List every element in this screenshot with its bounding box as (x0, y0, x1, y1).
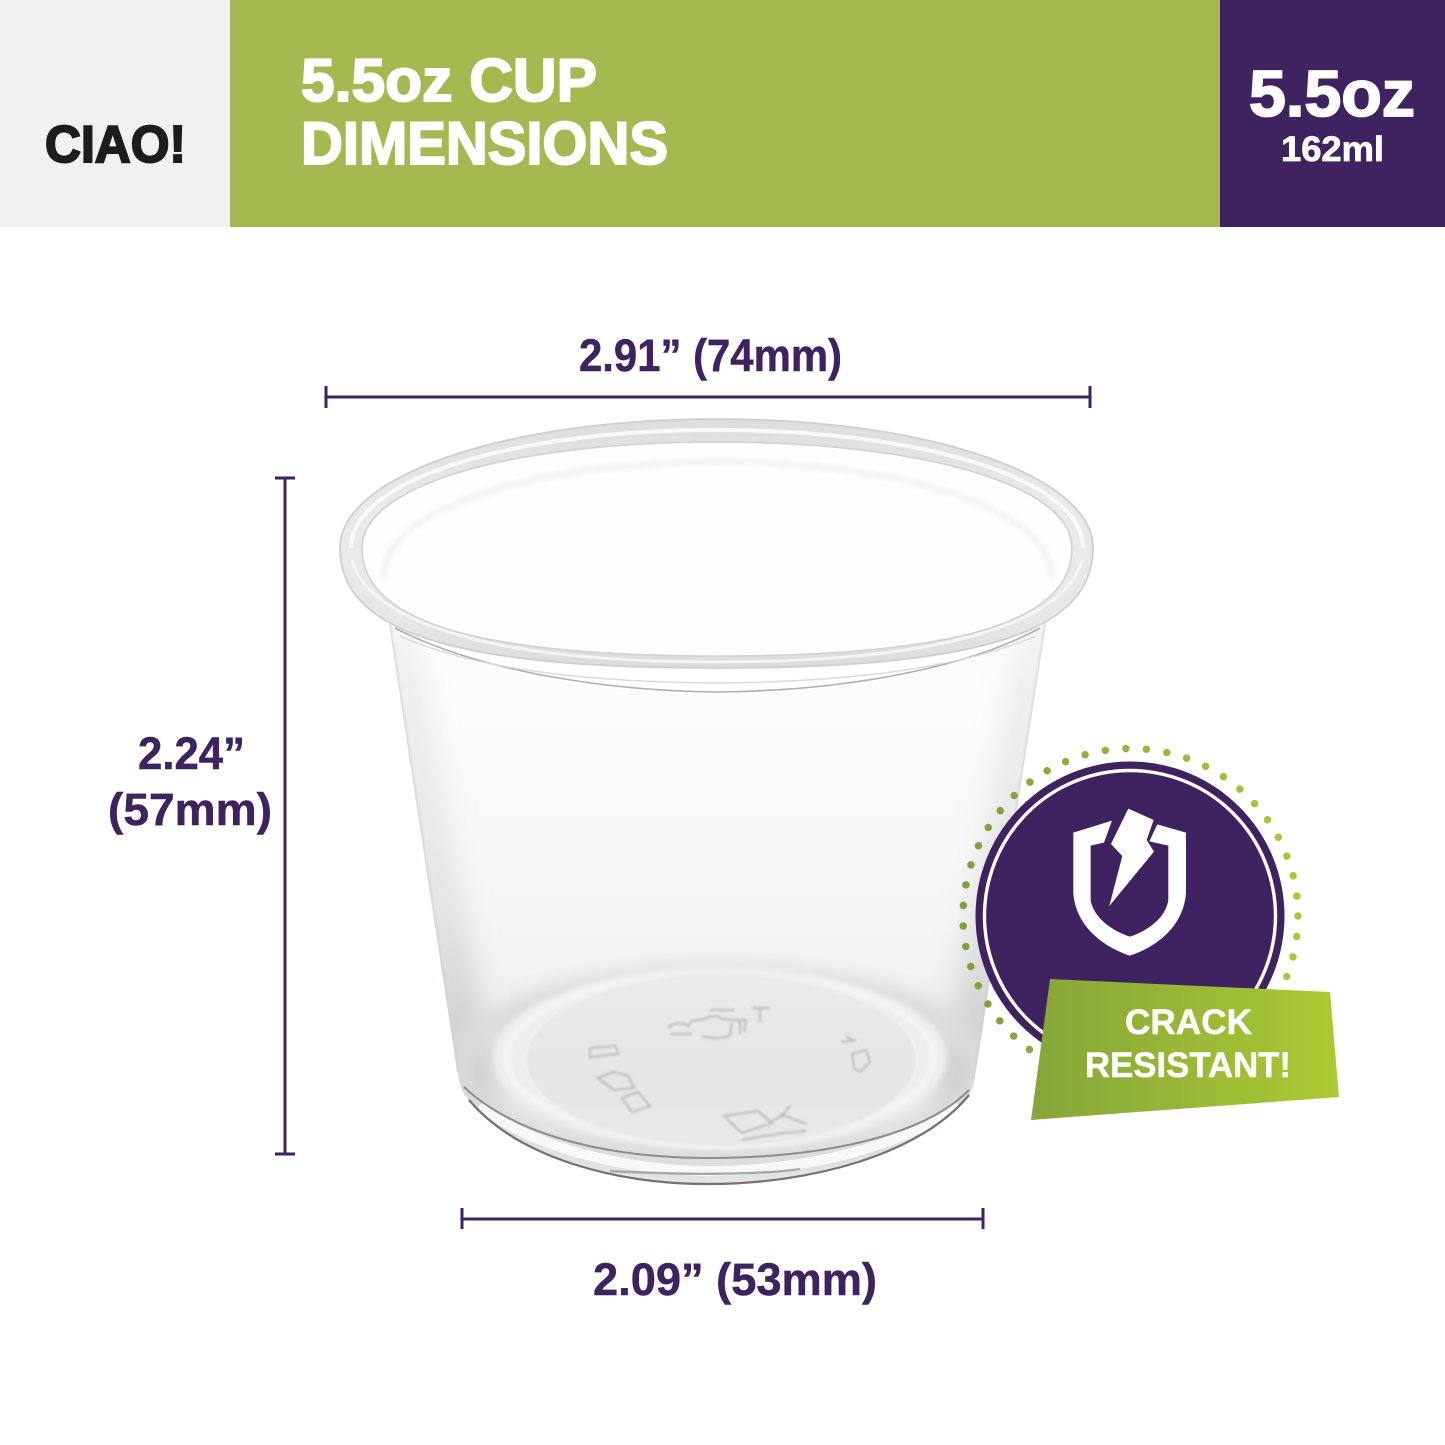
embossed base marks (590, 1008, 870, 1140)
cup bottom edge (480, 1105, 958, 1171)
clear plastic cup (340, 419, 1093, 1184)
white inner ring (984, 770, 1276, 1062)
cup body (388, 618, 1047, 1184)
title: DIMENSIONS (301, 110, 668, 177)
icon: cracked shield with lightning (1073, 809, 1186, 956)
green banner (1031, 979, 1339, 1120)
header: capacity panel (1220, 0, 1445, 227)
header: title panel (230, 0, 1220, 227)
dimension: top width (326, 330, 1090, 408)
banner text: RESISTANT! (1085, 1046, 1291, 1085)
dimension: height: (57mm) (108, 784, 272, 835)
capacity in ounces: 5.5oz (1249, 57, 1415, 130)
cup base rings (494, 966, 946, 1150)
dotted ring (963, 748, 1298, 1084)
dimension: top width: 2.91” (74mm) (579, 330, 842, 381)
capacity in millilitres: 162ml (1281, 130, 1384, 169)
inner wall shading (384, 462, 1052, 580)
brand name: CIAO! (45, 116, 186, 174)
banner text: CRACK (1125, 1003, 1252, 1042)
crack resistant badge (963, 748, 1339, 1120)
cup inside (362, 442, 1072, 656)
header: brand panel (0, 0, 230, 227)
dimension: height (108, 478, 295, 1154)
purple disc (976, 762, 1284, 1070)
cup side shading (384, 620, 1051, 1162)
dimension: bottom width: 2.09” (53mm) (593, 1254, 877, 1305)
title: 5.5oz CUP (301, 47, 597, 114)
under rim ridge (395, 628, 1040, 692)
dimension: bottom width (462, 1208, 983, 1305)
dimension: height: 2.24” (138, 728, 245, 779)
cup rim (340, 419, 1093, 668)
